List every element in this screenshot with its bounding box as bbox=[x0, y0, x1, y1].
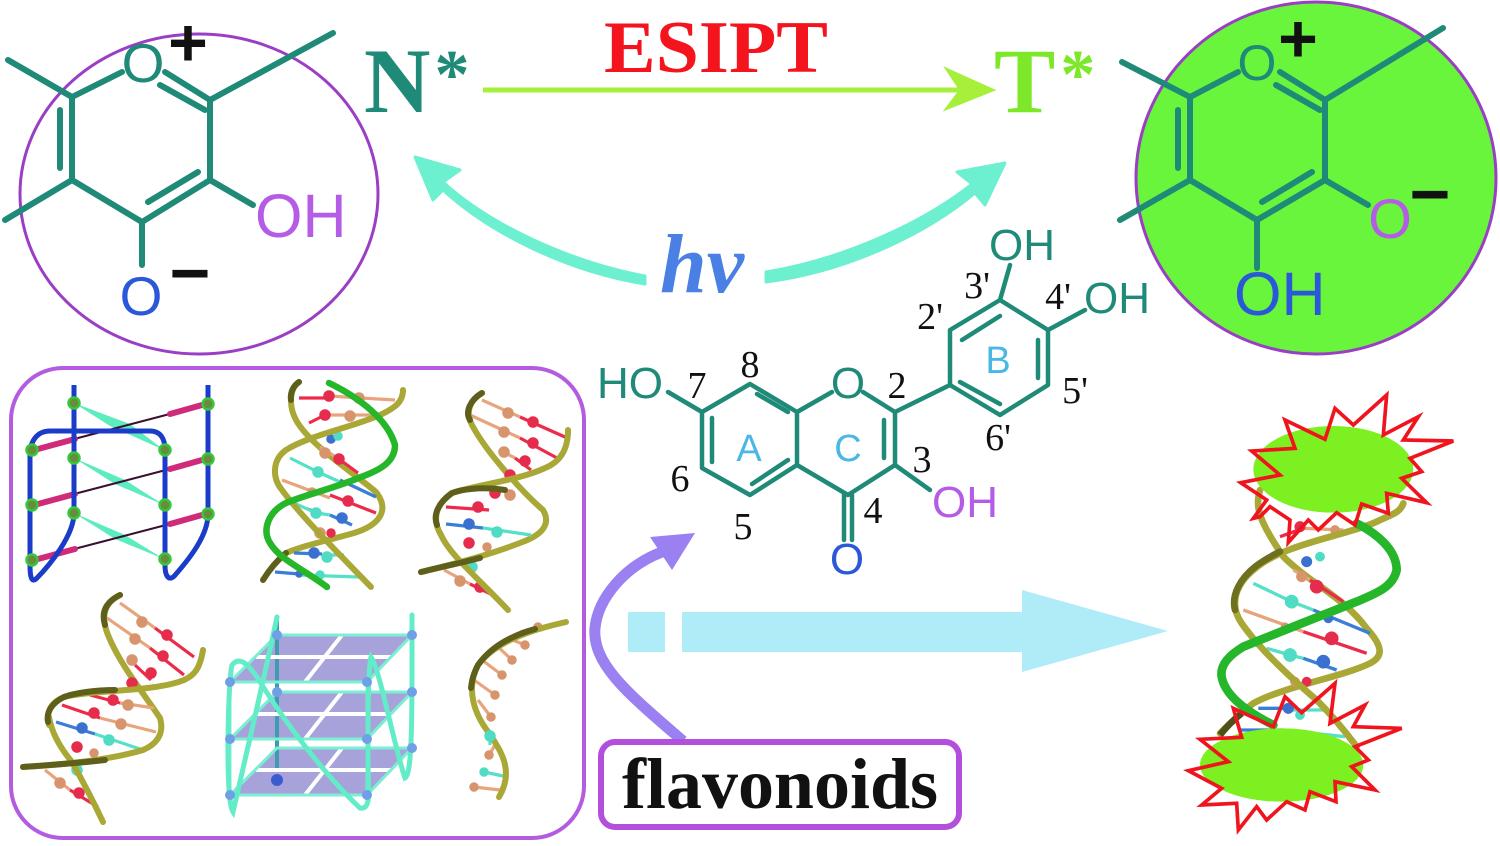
text: OH 4': OH bbox=[1084, 274, 1150, 323]
text: ring O: O bbox=[831, 359, 865, 408]
panel: T* excited state molecule bbox=[1120, 1, 1496, 354]
heading: ESIPT: ESIPT bbox=[604, 7, 828, 89]
position numbers: 7 bbox=[688, 365, 706, 407]
arrow: flavonoids to structure (purple curved) bbox=[595, 533, 695, 741]
label: hv: hv bbox=[660, 218, 746, 311]
text: O plus: O bbox=[122, 32, 164, 94]
text: minus sign: − bbox=[170, 234, 210, 312]
position numbers: 2 bbox=[888, 365, 906, 407]
text: O minus: O bbox=[120, 265, 162, 327]
panel: DNA structures bbox=[11, 368, 584, 838]
DNA duplex top right bbox=[421, 393, 568, 610]
position numbers: 5 bbox=[734, 506, 752, 548]
ring labels bbox=[736, 340, 1011, 470]
text: HO: HO bbox=[597, 359, 663, 408]
label: N*: N bbox=[364, 30, 430, 132]
label box: flavonoids: flavonoids bbox=[622, 744, 938, 824]
position numbers: 3 bbox=[912, 439, 932, 481]
position numbers: 5' bbox=[1062, 370, 1088, 412]
DNA duplex bottom left bbox=[23, 595, 203, 822]
label: T*: * bbox=[1060, 37, 1095, 114]
molecular bonds: T* form bbox=[1120, 28, 1443, 268]
G-quadruplex cyan with purple tetrads bbox=[225, 615, 417, 812]
text: carbonyl O blue: O bbox=[830, 535, 864, 584]
flavonoid chemical structure bbox=[597, 221, 1150, 584]
ring labels: C bbox=[834, 428, 862, 470]
label: N*: * bbox=[434, 37, 469, 114]
position numbers bbox=[670, 265, 1088, 548]
bonds bbox=[668, 265, 1085, 540]
position numbers: 4' bbox=[1045, 276, 1071, 318]
text: O plus: O bbox=[1238, 35, 1276, 91]
text: plus sign: + bbox=[1278, 1, 1318, 77]
text: OH 3 purple: OH bbox=[932, 478, 998, 527]
label: T*: T bbox=[994, 30, 1055, 132]
position numbers: 6' bbox=[985, 417, 1011, 459]
arrow: ESIPT N* to T* bbox=[483, 72, 990, 106]
arrow: hv to T* bbox=[766, 163, 1005, 282]
position numbers: 4 bbox=[864, 490, 882, 532]
ring labels: A bbox=[736, 428, 762, 470]
text: OH 3': OH bbox=[989, 221, 1055, 270]
position numbers: 8 bbox=[740, 344, 760, 386]
position numbers: 3' bbox=[964, 265, 990, 307]
DNA triplex with green strand bbox=[263, 382, 403, 587]
DNA with flavonoid fluorescence bursts bbox=[1188, 395, 1453, 830]
text: O minus: O bbox=[1368, 187, 1412, 250]
text: OH purple: OH bbox=[255, 182, 346, 250]
burst: bottom bbox=[1188, 683, 1402, 830]
arrow: hv to N* bbox=[415, 157, 645, 284]
ring labels: B bbox=[985, 340, 1011, 382]
molecular bonds: N* form bbox=[5, 33, 333, 265]
text: OH blue: OH bbox=[1234, 260, 1326, 328]
single-stranded DNA bbox=[470, 622, 566, 797]
burst: top bbox=[1241, 395, 1453, 542]
position numbers: 2' bbox=[917, 296, 943, 338]
text: plus sign: + bbox=[168, 5, 208, 81]
position numbers: 6 bbox=[670, 458, 690, 500]
panel: N* excited state molecule bbox=[5, 5, 378, 354]
text: minus sign: − bbox=[1410, 155, 1450, 233]
arrow: light blue binding arrow bbox=[628, 590, 1168, 672]
G-quadruplex blue bbox=[26, 385, 214, 580]
